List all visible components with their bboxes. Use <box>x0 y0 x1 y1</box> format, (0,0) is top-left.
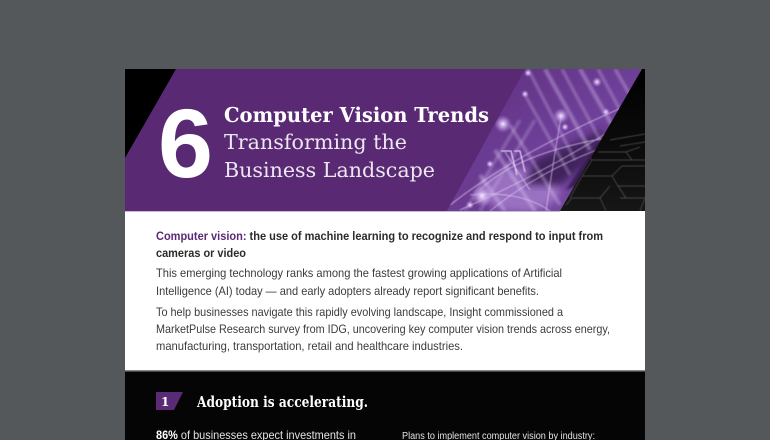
number badge <box>156 392 183 410</box>
title <box>224 103 489 182</box>
dark hexagon mesh <box>555 69 645 211</box>
panel: introduction <box>125 211 645 371</box>
black corner wedge <box>125 69 176 158</box>
paragraph two: To help businesses navigate this rapidly evolving landscape, Insight commissioned a <box>156 306 563 319</box>
tech image strip <box>447 69 642 212</box>
panel: section one, adoption <box>125 370 645 440</box>
definition <box>156 230 603 260</box>
paragraph two: MarketPulse Research survey from IDG, uncovering key computer vision trends across energy, <box>156 323 610 336</box>
title: Business Landscape <box>224 158 435 182</box>
title: Computer Vision Trends <box>224 103 489 127</box>
number badge: 1 <box>161 395 169 409</box>
paragraph one <box>156 267 562 298</box>
paragraph two: manufacturing, transportation, retail and healthcare industries. <box>156 340 463 353</box>
paragraph two <box>156 306 610 353</box>
paragraph one: Intelligence (AI) today — and early adopters already report significant benefits. <box>156 285 539 298</box>
panel: header banner <box>125 69 645 212</box>
definition: cameras or video <box>156 247 246 260</box>
numeral 6: 6 <box>158 89 213 198</box>
section heading: Adoption is accelerating. <box>196 393 368 411</box>
light rays <box>480 69 630 211</box>
title: Transforming the <box>224 130 407 154</box>
definition: Computer vision: the use of machine learning to recognize and respond to input from <box>156 230 603 243</box>
paragraph one: This emerging technology ranks among the fastest growing applications of Artificial <box>156 267 562 280</box>
